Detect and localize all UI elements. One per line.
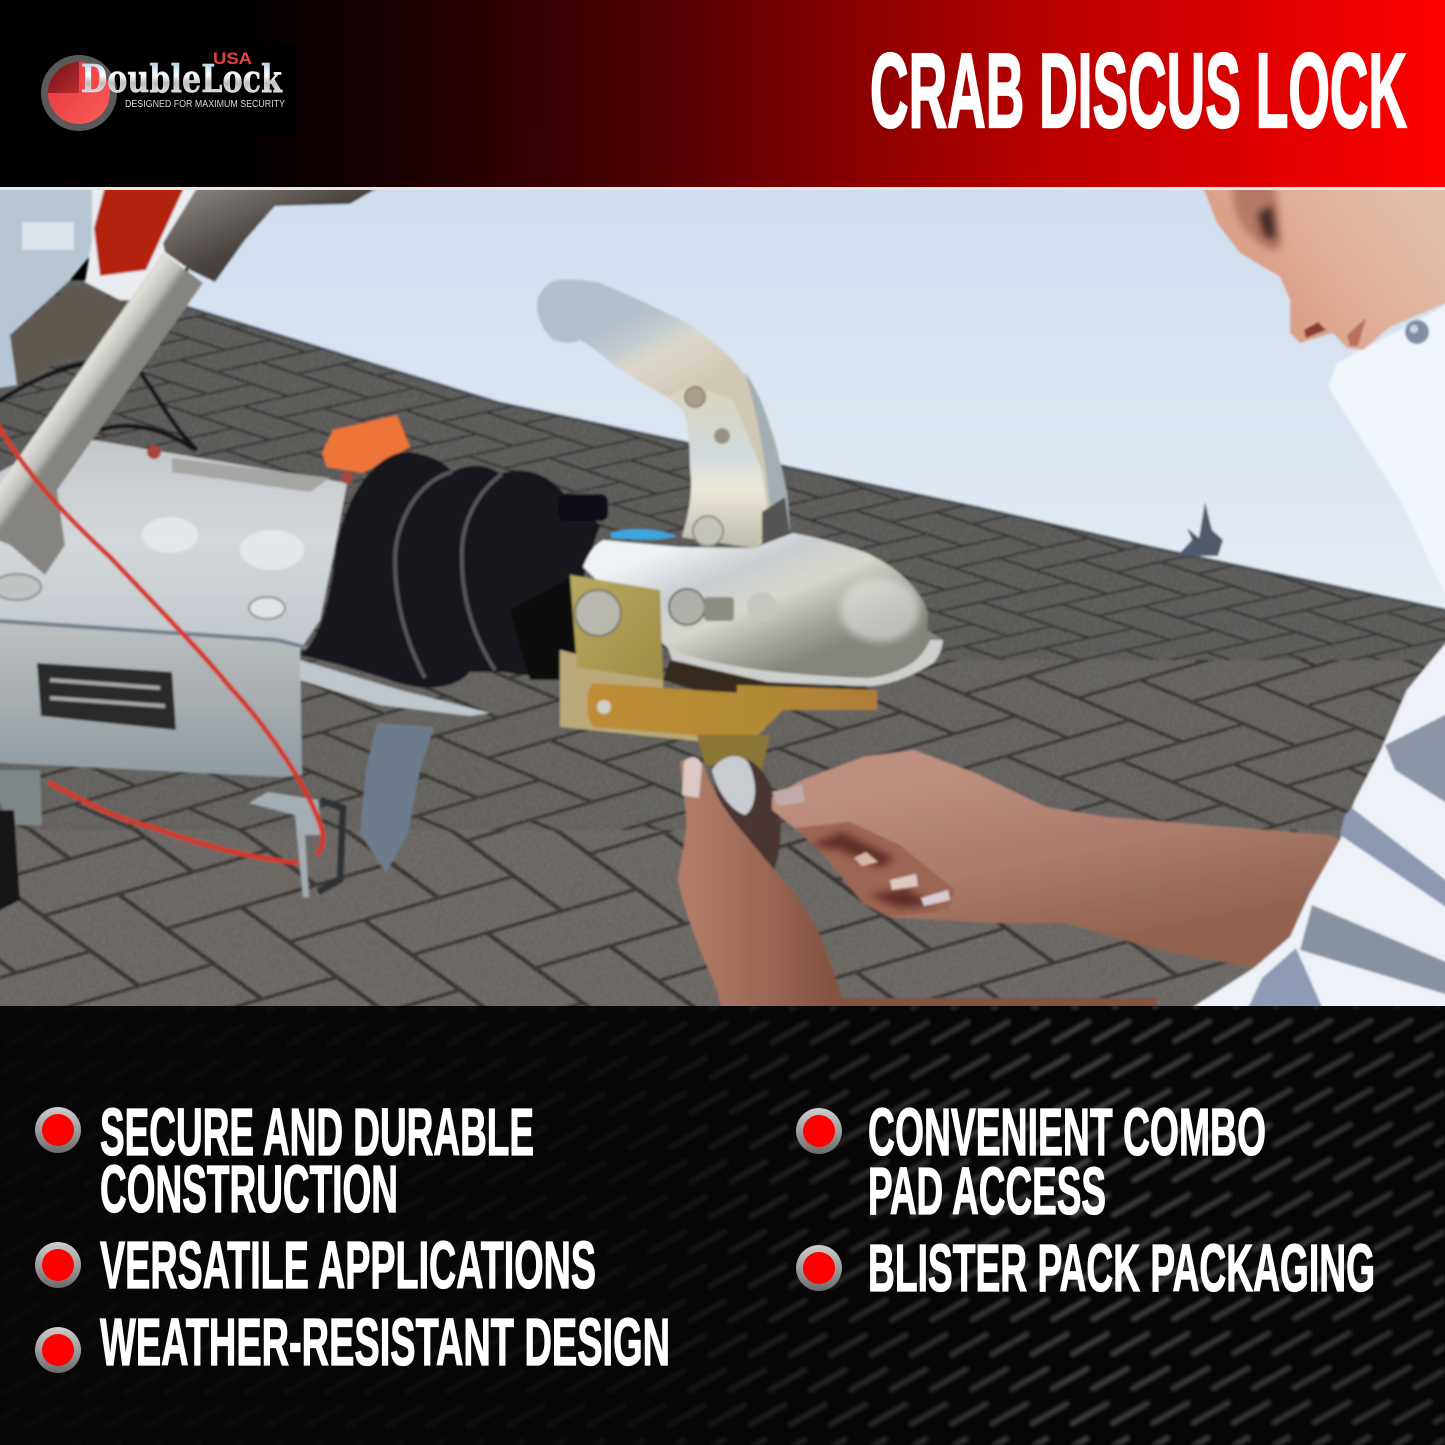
features panel background [0,1006,1445,1445]
woman's right hand and forearm [772,750,1340,968]
orange cap [322,415,410,473]
red cable [0,410,323,863]
discus padlock in hand [697,735,781,880]
brass hitch lock plates [560,575,877,745]
photo: hitch lock being fitted on trailer coupling [0,175,1445,1025]
white wall [187,175,1445,614]
data plate [37,663,176,730]
feature: versatile applications: VERSATILE APPLICATIONS [100,1228,596,1303]
coupling handle chrome [537,279,790,548]
bullet [35,1327,81,1373]
woman's left hand [678,757,1160,1025]
black rubber bellows [300,452,608,688]
trailer background: grey column and red panel [0,175,195,390]
weed at wall base [1177,502,1223,556]
feature: convenient combo pad access: PAD ACCESS [868,1154,1106,1229]
bullet [796,1245,842,1291]
paving bricks [0,280,1445,1025]
bullet [35,1107,81,1153]
logo disc [41,55,117,131]
feature: secure and durable construction: SECURE AND DURABLE [100,1095,534,1170]
header band [0,0,1445,190]
logo tagline: DESIGNED FOR MAXIMUM SECURITY [125,99,285,110]
bullet [796,1108,842,1154]
coupling head dome [583,529,943,692]
grey drawbar housing [0,440,353,777]
feature: secure and durable construction: CONSTRUCTION [100,1152,398,1227]
woman's face [1198,175,1445,350]
features: left column [35,1095,670,1380]
features: right column [796,1095,1375,1306]
lower jockey bracket [0,660,490,918]
woman's white collar [1328,305,1445,592]
cables behind drawbar [0,364,197,450]
feature: weather-resistant design: WEATHER-RESISTANT DESIGN [100,1305,670,1380]
woman's striped top [1192,641,1445,1006]
curled fingers [795,822,955,917]
logo wordmark: DoubleLock [81,56,283,101]
bullet [35,1242,81,1288]
handbrake lever [0,175,400,575]
logo: DoubleLock USA [20,44,296,136]
logo USA: USA [213,49,252,68]
